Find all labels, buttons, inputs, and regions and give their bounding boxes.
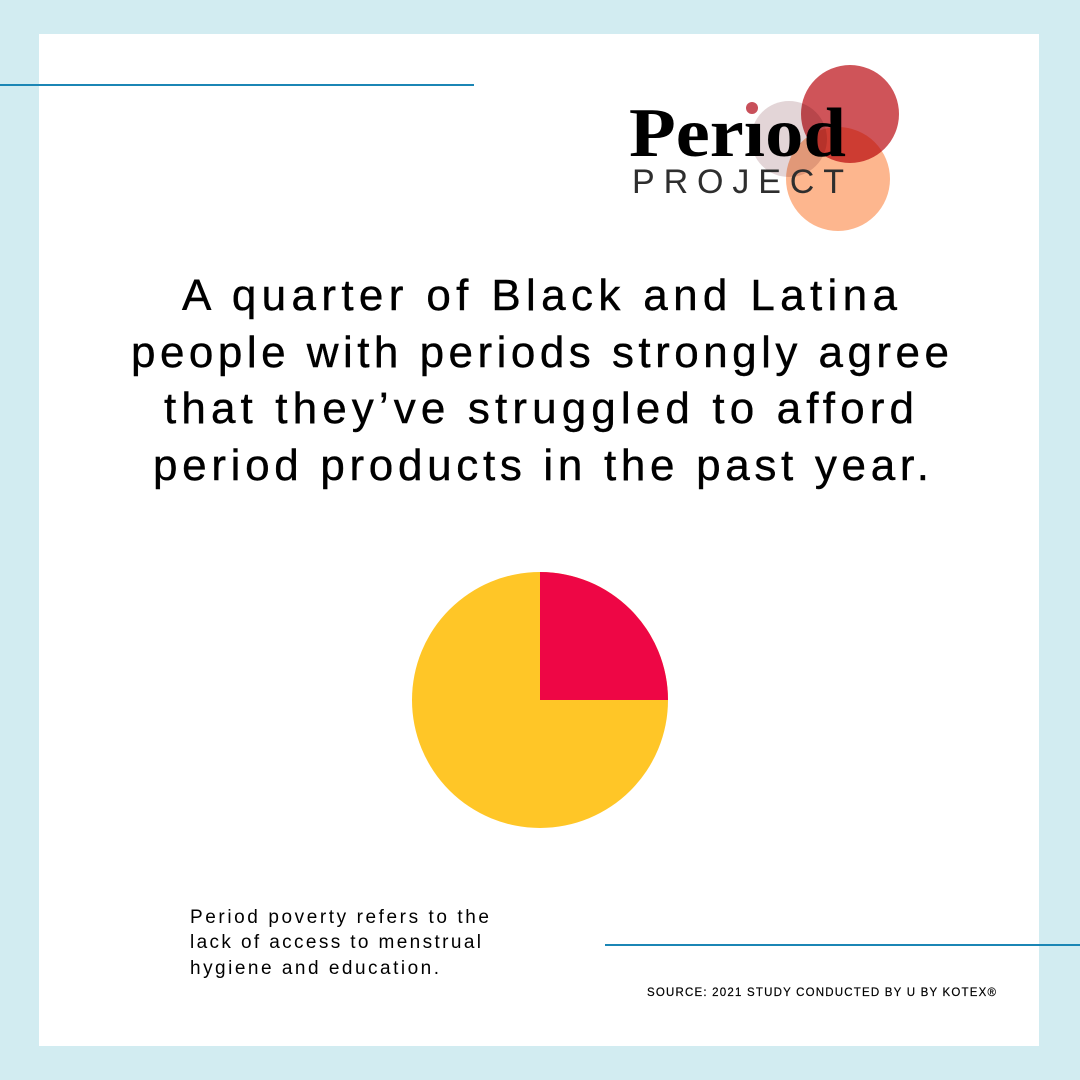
source note: SOURCE: 2021 STUDY CONDUCTED BY U BY KOTEX®: [647, 987, 997, 999]
pie slice: one quarter: [540, 572, 668, 700]
logo word: Period: Perıod: [629, 95, 846, 172]
icon: red circle: [801, 65, 899, 163]
pie chart: [412, 572, 668, 828]
heading: [131, 271, 949, 490]
icon: mauve circle: [751, 101, 827, 177]
text block: period poverty definition: Period poverty refers to the: [190, 907, 489, 928]
pie slice: three quarters: [412, 572, 668, 828]
logo word: PROJECT: PROJECT: [632, 163, 844, 201]
text block: period poverty definition: [190, 907, 489, 979]
heading: that they’ve struggled to afford: [164, 384, 914, 433]
text block: period poverty definition: hygiene and education.: [190, 958, 439, 979]
logo: Period Project: [629, 65, 899, 231]
heading: A quarter of Black and Latina: [182, 271, 898, 320]
heading: period products in the past year.: [153, 441, 929, 490]
text block: period poverty definition: lack of access to menstrual: [190, 932, 481, 953]
icon: red dot on the i: [746, 102, 758, 114]
heading: people with periods strongly agree: [131, 328, 949, 377]
icon: orange circle: [786, 127, 890, 231]
